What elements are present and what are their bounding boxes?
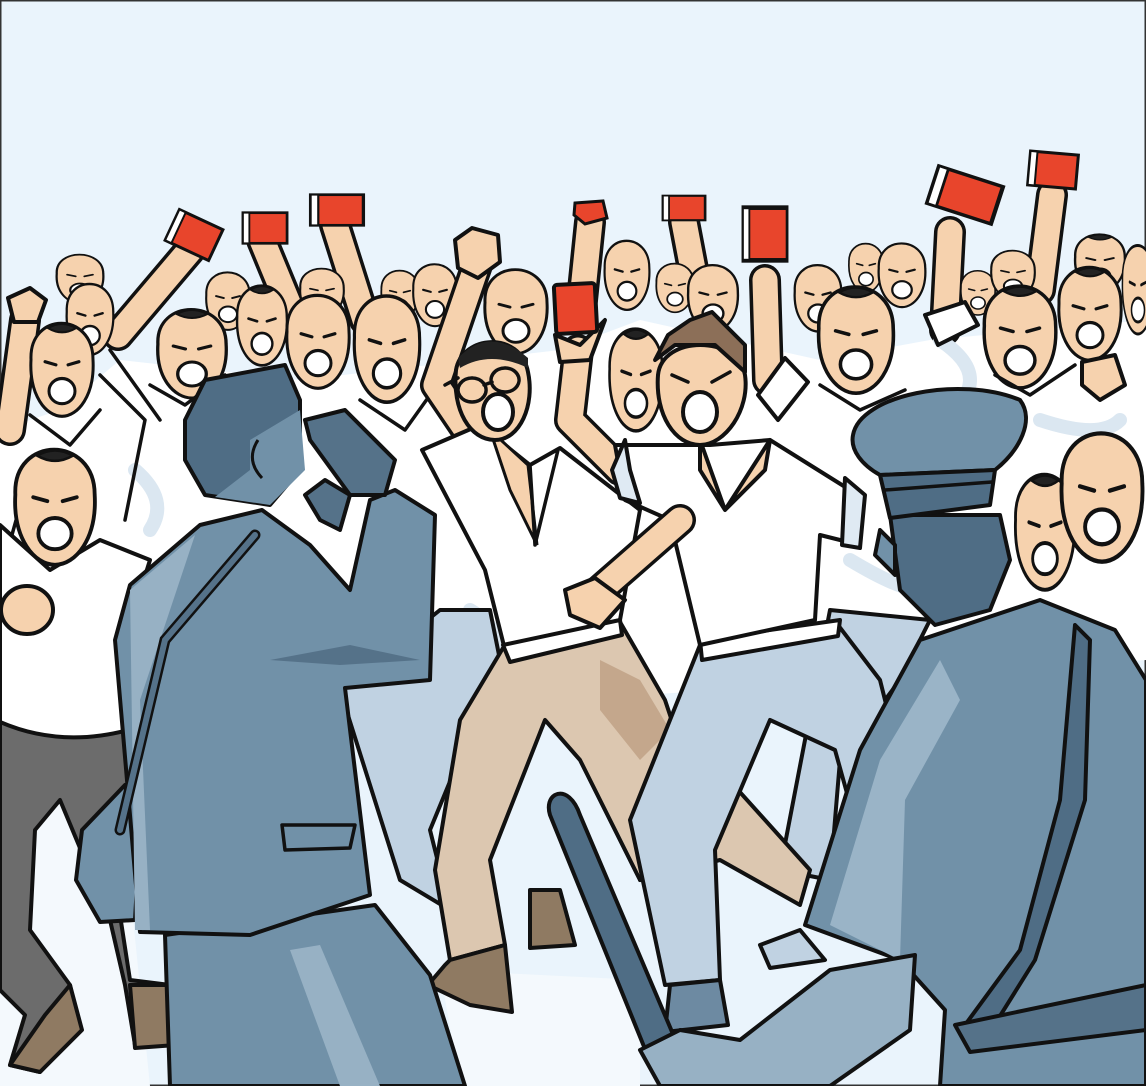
shoes xyxy=(665,980,728,1032)
belt xyxy=(503,620,622,662)
light trousers behind the main figures xyxy=(340,610,930,910)
raised fist xyxy=(455,228,500,278)
body xyxy=(805,600,1146,1086)
crowd collars and sleeves xyxy=(5,288,1125,560)
head xyxy=(185,365,300,505)
arm gripping baton xyxy=(640,955,915,1086)
pocket xyxy=(282,825,355,850)
right side heads xyxy=(1015,433,1143,590)
rolled sleeves xyxy=(612,440,640,503)
jacket xyxy=(115,490,435,935)
trousers xyxy=(630,625,905,985)
bag strap xyxy=(120,535,255,830)
shoes xyxy=(428,945,512,1012)
police officer xyxy=(640,389,1146,1086)
shirt xyxy=(615,440,860,645)
belt xyxy=(955,985,1146,1052)
shirt xyxy=(422,425,640,650)
photographer xyxy=(76,365,465,1086)
raised arms holding books xyxy=(10,195,1052,430)
white shirts of the crowd xyxy=(0,320,1146,740)
main figure: man with glasses xyxy=(422,228,810,1012)
trousers xyxy=(435,622,700,960)
shoulder strap xyxy=(965,625,1090,1040)
baton xyxy=(549,794,695,1086)
main figure: man with brown hair xyxy=(565,312,905,1032)
cap band xyxy=(880,470,995,518)
red books xyxy=(165,151,1078,261)
glasses xyxy=(445,368,519,402)
cap crown xyxy=(853,389,1026,475)
head xyxy=(455,342,530,440)
belt xyxy=(700,620,840,660)
crowd shirt shading xyxy=(20,340,1120,725)
back row of heads xyxy=(57,234,1146,355)
middle row of heads xyxy=(31,267,1121,431)
floor highlights xyxy=(0,790,640,1086)
rolled sleeve right xyxy=(925,302,978,345)
forearm and hand xyxy=(600,520,680,590)
front left man xyxy=(0,450,176,1072)
bag xyxy=(76,785,140,922)
raised red book and hand in centre xyxy=(554,283,620,470)
raised fist far left xyxy=(8,288,46,322)
trousers xyxy=(165,905,465,1086)
fist right xyxy=(1082,355,1125,400)
head xyxy=(890,515,1010,625)
rolled sleeve centre right xyxy=(758,358,808,420)
head xyxy=(658,345,746,445)
camera and hands xyxy=(305,410,395,495)
